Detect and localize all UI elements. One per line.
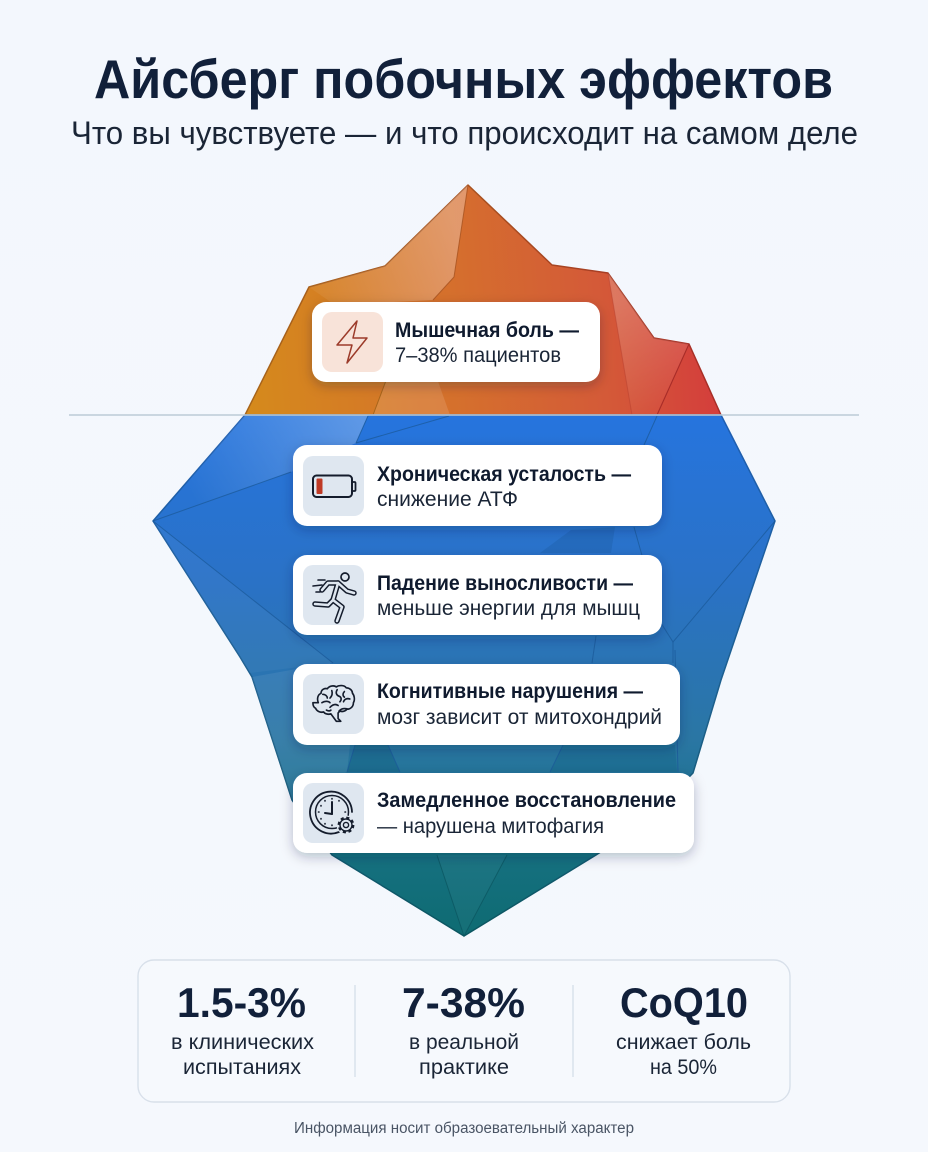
panel: statistics <box>138 960 790 1102</box>
stat: CoQ10: CoQ10 <box>620 979 748 1026</box>
card text <box>377 788 676 838</box>
stat: real practice: 7-38% <box>402 979 525 1026</box>
card text: Падение выносливости — <box>377 571 633 595</box>
card: muscle pain <box>312 302 600 382</box>
iceberg body below water <box>153 415 775 936</box>
card text <box>377 462 631 511</box>
footer note: Информация носит образоевательный характер <box>294 1120 634 1137</box>
card text: Когнитивные нарушения — <box>377 679 643 703</box>
stat: clinical trials <box>171 979 314 1079</box>
stat: CoQ10 <box>616 979 751 1079</box>
stat: clinical trials: 1.5-3% <box>177 979 306 1026</box>
card text: Мышечная боль — <box>395 318 579 342</box>
card text <box>377 571 640 620</box>
card text: 7–38% пациентов <box>395 343 561 367</box>
card: cognitive impairment <box>293 664 680 745</box>
card text: Хроническая усталость — <box>377 462 631 486</box>
icon: low battery <box>303 456 364 516</box>
card text: снижение АТФ <box>377 487 518 511</box>
waterline <box>69 414 859 416</box>
stat: clinical trials: испытаниях <box>183 1055 301 1079</box>
subtitle: Что вы чувствуете — и что происходит на самом деле <box>71 115 858 151</box>
card text: Замедленное восстановление <box>377 788 676 812</box>
stat: real practice: практике <box>419 1055 509 1079</box>
iceberg tip above water <box>245 185 721 415</box>
card: chronic fatigue <box>293 445 662 526</box>
stat: CoQ10: снижает боль <box>616 1030 751 1054</box>
card text: мозг зависит от митохондрий <box>377 705 662 729</box>
stat: clinical trials: в клинических <box>171 1030 314 1054</box>
stat: real practice <box>402 979 525 1079</box>
iceberg <box>153 185 775 936</box>
icon: clock with gear <box>303 783 364 843</box>
stat: CoQ10: на 50% <box>650 1055 717 1079</box>
card: endurance drop <box>293 555 662 635</box>
card text <box>377 679 662 729</box>
icon: brain <box>303 674 364 734</box>
title: Айсберг побочных эффектов <box>94 48 833 110</box>
icon: lightning bolt <box>322 312 383 372</box>
card text: меньше энергии для мышц <box>377 596 640 620</box>
icon: running person <box>303 565 364 625</box>
card text: — нарушена митофагия <box>377 814 604 838</box>
card: slow recovery <box>293 773 694 853</box>
stat: real practice: в реальной <box>409 1030 519 1054</box>
card text <box>395 318 579 367</box>
